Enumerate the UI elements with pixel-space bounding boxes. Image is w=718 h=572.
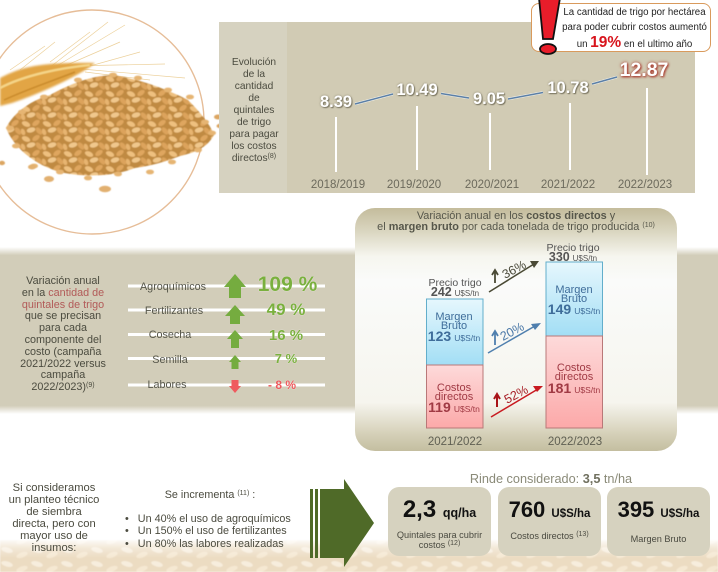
bar labels 2021/2022: 119 U$S/tn (428, 398, 480, 414)
text: planteo tecnico: Si consideramos (13, 482, 95, 494)
text: planteo tecnico: mayor uso de (20, 530, 88, 542)
value labels: 8.39 (320, 93, 352, 111)
wheat pile (0, 73, 224, 192)
text: variacion description: 2022/2023)(9) (31, 381, 95, 393)
text: evolucion description: los costos (231, 141, 277, 152)
text: evolucion description: cantidad (235, 81, 273, 92)
year labels (311, 179, 672, 191)
bar labels 2021/2022: Costos (437, 382, 471, 394)
value labels: 12.87 (620, 59, 668, 81)
year labels: 2021/2022 (541, 179, 595, 191)
box: quintales: 2,3 qq/ha (403, 496, 476, 523)
text: evolucion description: Evolución (232, 57, 276, 68)
text: se incrementa: Se incrementa (11) : (165, 489, 255, 501)
bar labels 2022/2023: 181 U$S/tn (548, 380, 600, 396)
value labels: 10.49 (396, 81, 438, 99)
text: se incrementa: • Un 80% las labores realizadas (125, 538, 284, 550)
bar labels 2021/2022: 123 U$S/tn (428, 328, 480, 344)
percentages: 16 % (269, 327, 303, 344)
arrows (488, 264, 538, 417)
callout: un 19% en el ultimo año (577, 34, 692, 51)
panel: costos directos y margen bruto: 52% (502, 383, 531, 407)
text: se incrementa: • Un 40% el uso de agroquímicos (125, 513, 291, 525)
bar labels 2021/2022: 242 U$S/tn (431, 285, 479, 299)
bar labels 2022/2023: 330 U$S/tn (549, 250, 597, 264)
text: variacion description: para cada (39, 322, 87, 334)
percentages: 49 % (267, 300, 305, 319)
text: evolucion description: de la (243, 69, 265, 80)
text: planteo tecnico: insumos: (32, 542, 76, 554)
bar labels 2021/2022: directos (435, 390, 473, 402)
text: planteo tecnico: directa, pero con (12, 518, 96, 530)
row labels: Fertilizantes (145, 305, 203, 317)
box: margen bruto (607, 487, 710, 556)
text: planteo tecnico: un planteo técnico (9, 494, 99, 506)
callout: La cantidad de trigo por hectárea (563, 7, 706, 18)
bar axis years (428, 436, 602, 448)
box: margen bruto: 395 U$S/ha (618, 497, 699, 522)
wheat photo in circle (0, 9, 219, 235)
text: variacion description: quintales de trigo (22, 299, 104, 311)
line chart (335, 76, 648, 175)
percentages (258, 273, 317, 392)
panel title: el margen bruto por cada tonelada de trigo producida (10) (377, 220, 655, 232)
icon: exclamation mark (538, 0, 561, 55)
box: costos directos: Costos directos (13) (510, 531, 589, 541)
panel: costos directos y margen bruto: 20% (498, 320, 527, 344)
percentages: - 8 % (268, 378, 296, 392)
rinde heading: Rinde considerado: 3,5 tn/ha (470, 472, 632, 486)
text: variacion description: componente del (25, 334, 101, 346)
value labels: 9.05 (473, 90, 505, 108)
bar labels 2021/2022: Bruto (441, 320, 467, 332)
box: costos directos: 760 U$S/ha (509, 497, 590, 522)
bar labels 2022/2023: 149 U$S/tn (548, 300, 600, 316)
text: evolucion description: para pagar (229, 129, 279, 140)
year labels: 2018/2019 (311, 179, 365, 191)
bar labels 2021/2022: Margen (435, 310, 473, 322)
box: quintales (388, 487, 491, 556)
callout: para poder cubrir costos aumentó (562, 22, 707, 33)
year labels: 2022/2023 (618, 179, 672, 191)
row labels (140, 281, 206, 391)
callout (531, 3, 711, 52)
bar labels 2021/2022 (428, 277, 482, 414)
text: evolucion description: quintales (234, 105, 274, 116)
bar axis years: 2022/2023 (548, 436, 602, 448)
wheat ear (10, 22, 185, 80)
text: variacion description: en la cantidad de (22, 287, 104, 299)
bar labels 2022/2023: directos (555, 370, 593, 382)
panel: evolucion chart (219, 22, 695, 193)
bar labels 2021/2022: Precio trigo (428, 277, 482, 289)
text: evolucion description: de trigo (237, 117, 271, 128)
box: margen bruto: Margen Bruto (631, 534, 686, 544)
row labels: Agroquímicos (140, 281, 206, 293)
text: variacion description: 2021/2022 versus (20, 358, 106, 370)
text: planteo tecnico (9, 482, 99, 554)
text: variacion description: campaña (41, 369, 85, 381)
value labels: 10.78 (547, 79, 589, 97)
text: variacion description: costo (campaña (25, 346, 101, 358)
row labels: Semilla (152, 354, 188, 366)
bar labels 2022/2023 (546, 242, 600, 396)
text: variacion description: que se precisan (25, 310, 101, 322)
year labels: 2020/2021 (465, 179, 519, 191)
bars (426, 262, 602, 428)
box: quintales: Quintales para cubrir costos (12) (397, 530, 482, 550)
panel title: Variación anual en los costos directos y (417, 210, 615, 222)
panel title (377, 210, 655, 232)
text: planteo tecnico: de siembra (26, 506, 82, 518)
year labels: 2019/2020 (387, 179, 441, 191)
text: evolucion description: de (248, 93, 260, 104)
text: evolucion description (229, 57, 279, 164)
text: evolucion description: directos(8) (232, 153, 276, 164)
bar labels 2022/2023: Precio trigo (546, 242, 600, 254)
bar labels 2022/2023: Costos (557, 362, 591, 374)
panel: costos directos y margen bruto: 36% (500, 258, 529, 282)
text: se incrementa: • Un 150% el uso de fertilizantes (125, 525, 287, 537)
value labels (320, 59, 670, 111)
text: variacion description (20, 275, 106, 393)
bar labels 2022/2023: Bruto (561, 292, 587, 304)
percentages: 7 % (275, 351, 297, 366)
bar axis years: 2021/2022 (428, 436, 482, 448)
box: costos directos (498, 487, 601, 556)
row labels: Labores (147, 379, 187, 391)
text: se incrementa (125, 489, 291, 550)
row labels: Cosecha (149, 329, 191, 341)
bar labels 2022/2023: Margen (555, 284, 593, 296)
cost component rows (128, 274, 325, 393)
percentages: 109 % (258, 273, 317, 296)
text: variacion description: Variación anual (26, 275, 100, 287)
